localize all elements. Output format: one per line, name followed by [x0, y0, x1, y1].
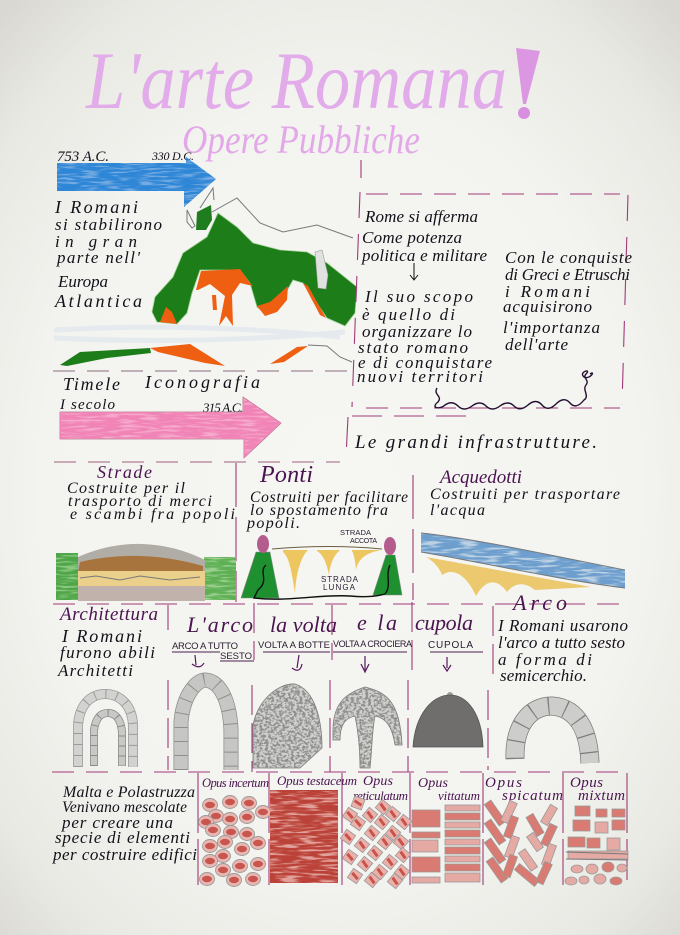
- panel: Opus testaceum: [270, 773, 357, 883]
- panel: arco a tutto sesto: ARCO A TUTTO: [172, 641, 238, 652]
- panel: Architettura: Architetti: [57, 661, 133, 680]
- panel: Architettura: furono abili: [60, 643, 155, 662]
- icon: exclamation mark: [516, 48, 540, 119]
- panel: Strade: e scambi fra popoli: [70, 506, 235, 523]
- illustration: cross vault: [333, 687, 402, 768]
- illustration: bridge: STRADA: [340, 528, 371, 537]
- text: conquests: di Greci e Etruschi: [505, 265, 630, 284]
- panel: Ponti: Costruiti per facilitare: [250, 489, 408, 506]
- text: Rome's goal: nuovi territori: [357, 367, 483, 386]
- text: conquests: dell'arte: [505, 335, 568, 354]
- panel: volta a crociera: [333, 610, 412, 768]
- arrow: [192, 655, 204, 667]
- panel: Rome political power: [352, 160, 632, 409]
- text: Rome's goal: [357, 207, 492, 386]
- divider: [54, 461, 340, 463]
- heading: la volta: la volta: [270, 612, 337, 637]
- panel: Opus spicatum: spicatum: [502, 788, 563, 804]
- illustration: bridge: STRADA: [321, 575, 359, 584]
- panel: volta a botte: [253, 612, 337, 768]
- divider: [53, 603, 630, 605]
- timeline arrow: pink: [60, 397, 281, 458]
- panel: Architettura: [57, 604, 158, 767]
- panel: Opus mixtum: [565, 775, 628, 885]
- panel: Opus reticulatum: [340, 774, 412, 889]
- panel: Arco: l'arco a tutto sesto: [498, 633, 625, 652]
- heading: timeline: Timele: [63, 374, 120, 394]
- illustration: round arch: [181, 680, 231, 770]
- panel: cupola: [413, 610, 483, 747]
- panel: Opus vittatum: [412, 776, 480, 883]
- text: Rome's goal: Il suo scopo: [364, 287, 473, 306]
- illustration: aqueduct: [421, 533, 625, 596]
- heading: Ponti: Ponti: [259, 462, 313, 488]
- illustration: bridge: [241, 528, 402, 599]
- panel: Opus reticulatum: reticulatum: [353, 788, 408, 803]
- panel: Acquedotti: Costruiti per trasportare: [430, 486, 620, 503]
- heading: timeline: Iconografia: [144, 372, 260, 392]
- panel: Strade: trasporto di merci: [68, 493, 212, 510]
- illustration: semicircular arch: [515, 706, 590, 763]
- illustration: barrel vault: [253, 684, 322, 768]
- heading: cupola: cupola: [415, 610, 473, 635]
- text: Malta e Polastruzza: per costruire edifici: [52, 845, 197, 864]
- arrow: [361, 656, 369, 672]
- heading: timeline: [59, 372, 260, 415]
- panel: volta a crociera: e la: [357, 610, 397, 635]
- divider: [53, 370, 347, 372]
- text: Rome's goal: organizzare lo: [362, 322, 472, 341]
- panel: Arco: a forma di: [498, 650, 592, 669]
- illustration: bridge: ACCOTA: [350, 538, 377, 545]
- text: Malta e Polastruzza: per creare una: [61, 813, 173, 832]
- text: Romans settled in Europe: Europa: [57, 272, 108, 291]
- illustration: double arch: [78, 694, 133, 767]
- text: Rome's goal: Rome si afferma: [364, 207, 478, 226]
- panel: arco a tutto sesto: [172, 612, 254, 770]
- panel: Opus vittatum: vittatum: [438, 788, 480, 803]
- subtitle: Opere Pubbliche: [182, 117, 420, 162]
- text: Romans settled in Europe: [54, 197, 162, 311]
- heading: Acquedotti: Acquedotti: [438, 467, 522, 488]
- text: Rome's goal: politica e militare: [361, 246, 487, 265]
- map of Roman Europe: [54, 188, 357, 366]
- heading: great infrastructures: Le grandi infrastrutture.: [354, 432, 597, 453]
- heading: timeline: I secolo: [59, 397, 116, 413]
- panel: Opus mixtum: mixtum: [578, 788, 625, 804]
- illustration: bridge: LUNGA: [323, 583, 356, 592]
- squiggle ornament: [435, 371, 592, 409]
- panel: Opus incertum: Opus incertum: [202, 776, 269, 790]
- text: Romans settled in Europe: Atlantica: [54, 291, 142, 311]
- panel: Opus testaceum: Opus testaceum: [277, 773, 357, 788]
- illustration: dome: [413, 692, 483, 747]
- text: Rome's goal: stato romano: [358, 338, 468, 357]
- text: conquests: [503, 248, 632, 354]
- text: conquests: i Romani: [505, 282, 590, 301]
- text: conquests: acquisirono: [503, 297, 592, 316]
- title: L'arte Romana: [85, 35, 507, 126]
- panel: Ponti: [241, 462, 408, 599]
- heading: Architettura: Architettura: [58, 604, 158, 625]
- text: Malta e Polastruzza: [52, 784, 197, 864]
- text: Romans settled in Europe: si stabilirono: [55, 215, 162, 234]
- panel: Arco: semicerchio.: [500, 666, 587, 685]
- panel: Arco: [497, 590, 628, 763]
- tiles: [340, 796, 412, 889]
- text: Malta e Polastruzza: Malta e Polastruzza: [62, 784, 195, 801]
- panel: Opus mixtum: Opus: [570, 775, 603, 791]
- heading: great infrastructures: [346, 416, 597, 457]
- island: [315, 250, 328, 289]
- illustration: road layers: [56, 544, 236, 601]
- text: conquests: l'importanza: [503, 318, 600, 337]
- text: Rome's goal: è quello di: [362, 305, 455, 324]
- heading: timeline: 315 A.C.: [202, 400, 243, 415]
- panel: Architettura: I Romani: [61, 626, 142, 646]
- bricks: [412, 805, 480, 883]
- panel: Acquedotti: [421, 467, 625, 596]
- panel: volta a crociera: VOLTA A CROCIERA: [333, 639, 412, 649]
- panel: Arco: I Romani usarono: [497, 616, 628, 635]
- panel: Strade: [56, 462, 236, 601]
- panel: volta a botte: VOLTA A BOTTE: [258, 640, 330, 651]
- text: Malta e Polastruzza: Venivano mescolate: [62, 799, 187, 816]
- panel: Acquedotti: l'acqua: [430, 502, 485, 519]
- text: Malta e Polastruzza: specie di elementi: [55, 828, 190, 847]
- timeline arrow: blue: 753 A.C.: [57, 149, 109, 165]
- bricks: [484, 800, 557, 886]
- stones and bricks: [565, 806, 628, 885]
- panel: arco a tutto sesto: SESTO: [220, 651, 252, 662]
- text: Romans settled in Europe: parte nell': [56, 248, 140, 267]
- panel: Opus reticulatum: Opus: [363, 774, 394, 789]
- panel: Opus vittatum: Opus: [418, 776, 449, 791]
- text: Rome's goal: e di conquistare: [358, 353, 492, 372]
- heading: Strade: Strade: [97, 462, 152, 482]
- heading: L'arco: L'arco: [186, 612, 253, 637]
- heading: Arco: Arco: [511, 590, 567, 615]
- arrow: [443, 657, 451, 671]
- panel: Ponti: popoli.: [246, 515, 300, 532]
- divider: [52, 771, 630, 773]
- panel: Opus spicatum: Opus: [485, 775, 522, 791]
- panel: Strade: Costruite per il: [67, 480, 186, 497]
- panel: cupola: CUPOLA: [428, 640, 473, 651]
- timeline arrow: blue: 330 D.C.: [151, 149, 194, 163]
- panel: Opus incertum: [198, 776, 270, 886]
- timeline arrow: blue: [57, 149, 216, 207]
- text: Rome's goal: Come potenza: [362, 228, 462, 247]
- panel: Opus spicatum: [484, 775, 563, 886]
- stones: [198, 796, 270, 886]
- arrow: [292, 655, 302, 670]
- text: Romans settled in Europe: in gran: [55, 232, 137, 251]
- text: conquests: Con le conquiste: [505, 248, 632, 267]
- text: Romans settled in Europe: I Romani: [54, 197, 138, 217]
- panel: Ponti: lo spostamento fra: [250, 502, 388, 519]
